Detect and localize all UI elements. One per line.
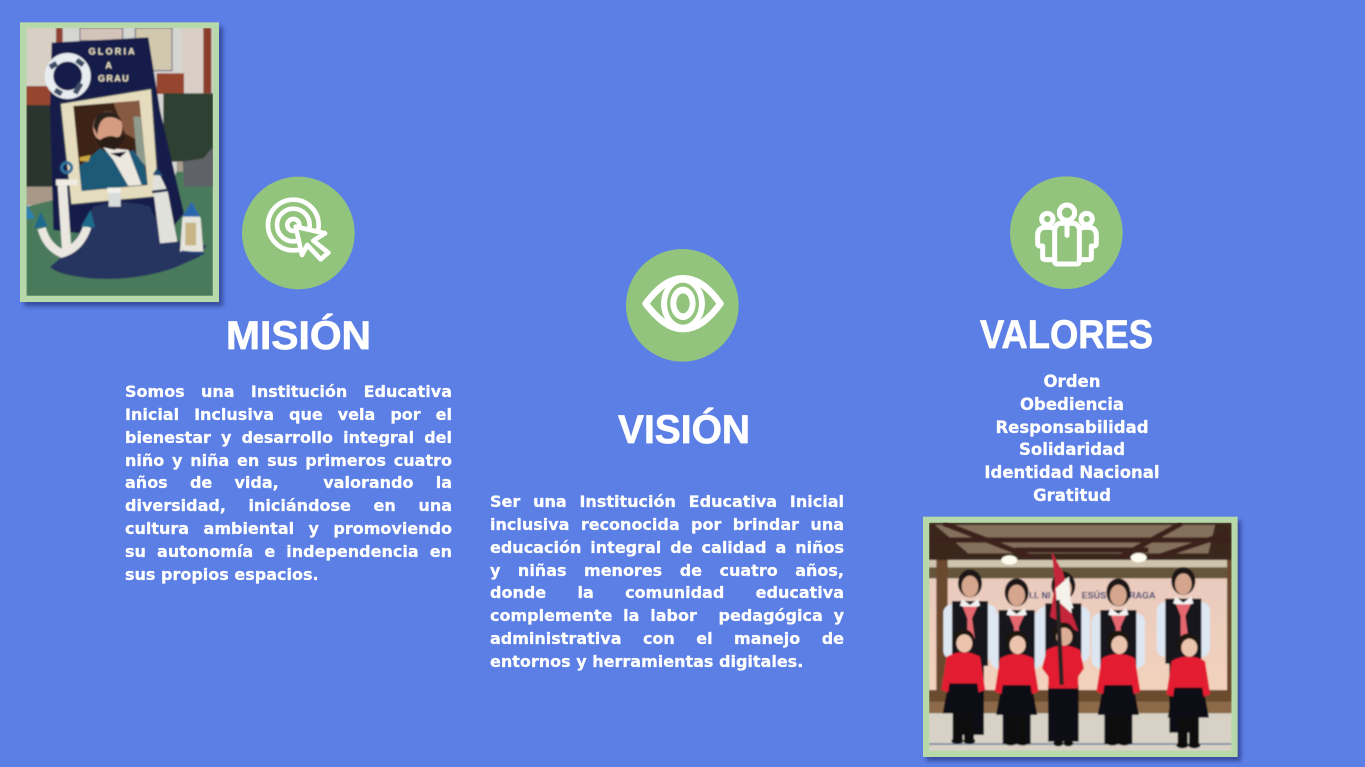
text block: vision: inclusiva reconocida por brindar una	[490, 515, 844, 534]
text block: vision: educación integral de calidad a niños	[490, 538, 844, 557]
text block: vision: administrativa con el manejo de	[490, 629, 844, 648]
list: valores: Solidaridad	[1019, 440, 1125, 459]
photo: Grau portrait display: A	[105, 60, 112, 70]
photo: Grau portrait display	[20, 22, 226, 309]
text block: vision	[490, 492, 844, 671]
text block: mision: Somos una Institución Educativa	[125, 382, 452, 401]
photo: students and teachers with flag: I.I. NI	[1029, 590, 1051, 600]
list: valores: Identidad Nacional	[984, 463, 1160, 482]
heading: mision: MISIÓN	[226, 312, 371, 358]
text block: mision: Inicial Inclusiva que vela por el	[125, 405, 452, 424]
text block: mision: bienestar y desarrollo integral del	[125, 428, 452, 447]
text block: mision: cultura ambiental y promoviendo	[125, 519, 452, 538]
list: valores: Gratitud	[1033, 486, 1111, 505]
photo: Grau portrait display: GRAU	[98, 73, 129, 83]
text block: mision: su autonomía e independencia en	[125, 542, 452, 561]
text block: vision: donde la comunidad educativa	[490, 583, 844, 602]
photo: Grau portrait display: GLORIA	[89, 47, 135, 57]
text block: mision: niño y niña en sus primeros cuatro	[125, 451, 452, 470]
text block: vision: complemente la labor pedagógica y	[490, 606, 844, 625]
icon: eye	[626, 249, 739, 362]
text block: mision: sus propios espacios.	[125, 565, 319, 584]
heading: valores: VALORES	[980, 313, 1153, 357]
text block: mision	[125, 382, 452, 584]
text block: mision: años de vida, valorando la	[125, 473, 452, 492]
text block: mision: diversidad, iniciándose en una	[125, 496, 452, 515]
text block: vision: Ser una Institución Educativa Inicial	[490, 492, 844, 511]
icon: group of people	[1010, 176, 1123, 289]
text block: vision: entornos y herramientas digitales.	[490, 652, 803, 671]
list: valores	[984, 372, 1160, 505]
list: valores: Obediencia	[1020, 395, 1124, 414]
text block: vision: y niñas menores de cuatro años,	[490, 561, 844, 580]
photo: students and teachers with flag: ESÚS	[1082, 589, 1106, 600]
photo: students and teachers with flag: RAGA	[1129, 590, 1156, 600]
photo: students and teachers with flag	[923, 516, 1244, 764]
list: valores: Responsabilidad	[995, 418, 1149, 437]
heading: vision: VISIÓN	[618, 406, 750, 452]
icon: target with cursor	[242, 176, 355, 290]
list: valores: Orden	[1044, 372, 1100, 391]
